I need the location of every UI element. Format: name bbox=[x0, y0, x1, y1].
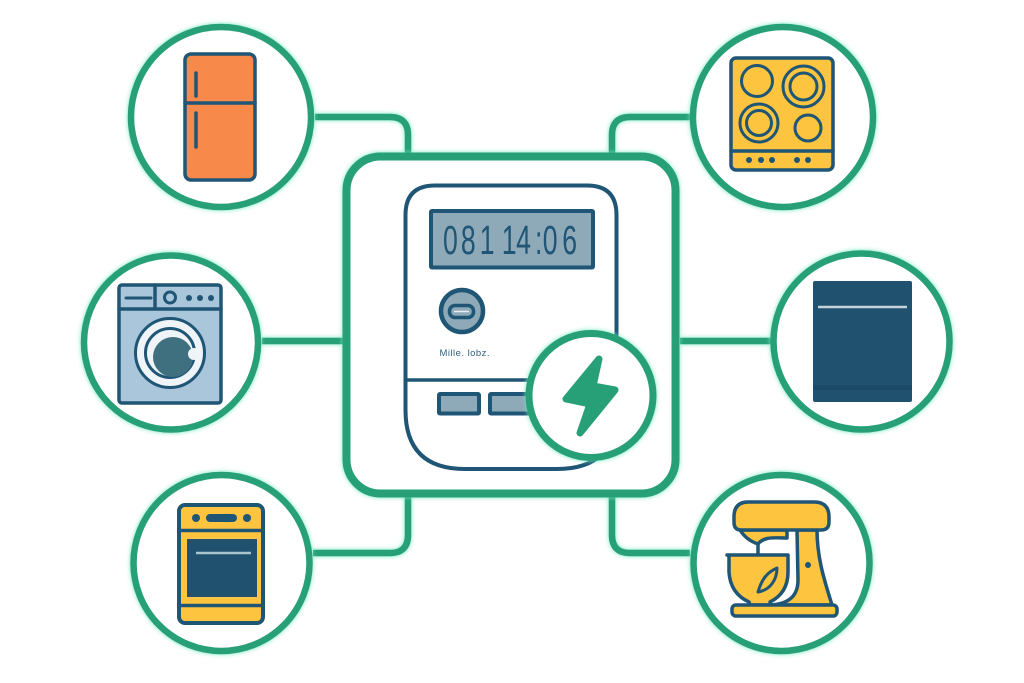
panel: washing machine bbox=[84, 256, 258, 430]
icon: refrigerator bbox=[185, 54, 255, 180]
meter divider bbox=[406, 378, 535, 382]
panel: refrigerator bbox=[131, 27, 311, 207]
meter display bbox=[431, 211, 593, 268]
meter label: Mille. lobz. bbox=[440, 348, 490, 359]
meter buttons bbox=[439, 394, 532, 414]
panel: induction hob bbox=[693, 27, 873, 207]
icon: dishwasher bbox=[813, 281, 912, 402]
icon: hob bbox=[731, 58, 833, 170]
panel: oven bbox=[134, 475, 310, 651]
icon: stand mixer bbox=[727, 502, 837, 616]
meter dial bbox=[441, 290, 483, 332]
panel: dishwasher bbox=[774, 254, 950, 430]
panel: central meter frame bbox=[346, 156, 676, 494]
icon: lightning bolt badge bbox=[529, 334, 653, 458]
meter display: 08 1 14:06 bbox=[443, 218, 577, 263]
meter body bbox=[406, 186, 616, 469]
connectors between the meter and appliances bbox=[262, 117, 771, 553]
panel: stand mixer bbox=[694, 475, 870, 651]
smart meter bbox=[406, 186, 616, 469]
icon: washing machine bbox=[119, 285, 221, 403]
icon: oven bbox=[179, 505, 263, 623]
